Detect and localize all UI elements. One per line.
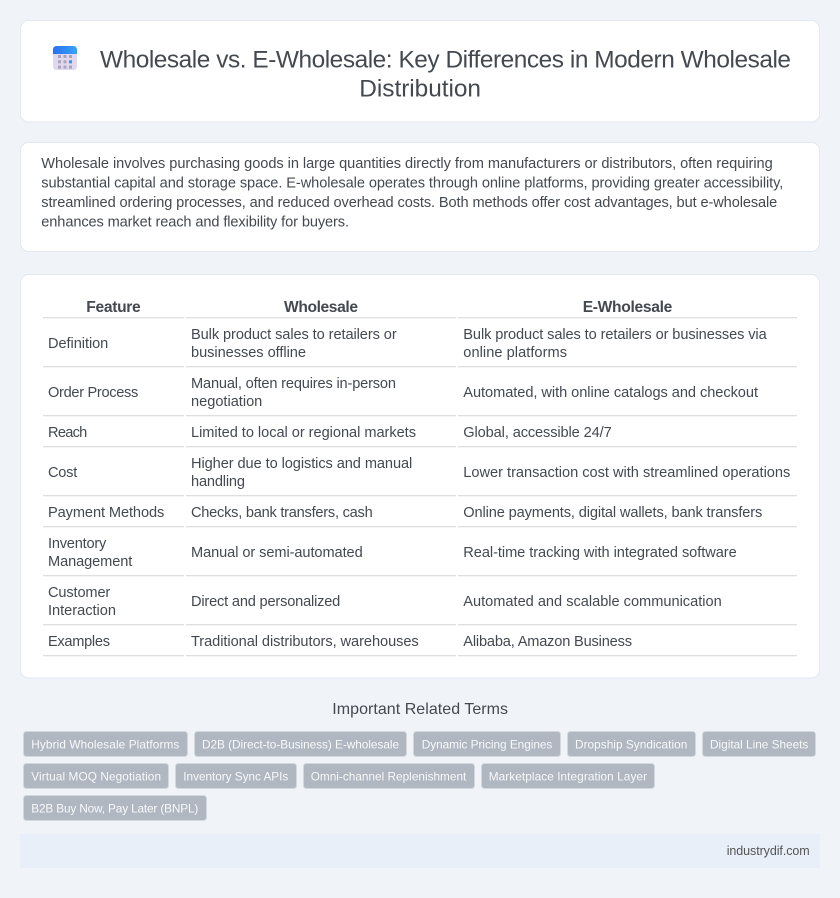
- tag list: [24, 732, 816, 820]
- icon: calendar: [53, 46, 77, 70]
- tag: hybrid wholesale platforms: [24, 732, 188, 756]
- text block: introduction paragraph: substantial capital and storage space. E-wholesale operates through online platforms, providing greater accessibility,: [41, 176, 783, 192]
- tag: hybrid wholesale platforms: Hybrid Wholesale Platforms: [31, 737, 179, 751]
- tag: dropship syndication: Dropship Syndication: [575, 737, 687, 751]
- table row: customer interaction: [48, 585, 722, 619]
- tag: dropship syndication: [568, 732, 696, 756]
- table row: cost: Lower transaction cost with streamlined operations: [463, 465, 790, 481]
- table row: definition: Definition: [48, 336, 108, 352]
- tag: marketplace integration layer: Marketplace Integration Layer: [489, 769, 647, 783]
- table row: order process: Manual, often requires in-person: [191, 376, 396, 392]
- table row: cost: Higher due to logistics and manual: [191, 456, 412, 472]
- tag: inventory sync apis: Inventory Sync APIs: [183, 769, 288, 783]
- table row: payment methods: Checks, bank transfers, cash: [191, 505, 373, 521]
- table row: definition: [48, 327, 768, 361]
- tag: omni-channel replenishment: Omni-channel Replenishment: [311, 769, 467, 783]
- table row: order process: [48, 376, 758, 410]
- title: [100, 46, 791, 102]
- table row: payment methods: Payment Methods: [48, 505, 164, 521]
- table row: inventory management: Manual or semi-automated: [191, 545, 363, 561]
- table row: order process: Automated, with online catalogs and checkout: [463, 385, 758, 401]
- table row: definition: Bulk product sales to retailers or: [191, 327, 397, 343]
- table row: examples: Traditional distributors, warehouses: [191, 634, 419, 650]
- tag: marketplace integration layer: [482, 764, 654, 788]
- table row: reach: Global, accessible 24/7: [463, 425, 612, 441]
- panel: title card: [20, 20, 820, 122]
- footer: [20, 834, 820, 868]
- table row: definition: Bulk product sales to retailers or businesses via: [463, 327, 768, 343]
- table row: examples: Examples: [48, 634, 110, 650]
- table row: definition: online platforms: [463, 345, 567, 361]
- table row: payment methods: Online payments, digital wallets, bank transfers: [463, 505, 762, 521]
- table row: reach: [48, 425, 612, 441]
- tag: d2b e-wholesale: D2B (Direct-to-Business) E-wholesale: [202, 737, 399, 751]
- tag: dynamic pricing engines: Dynamic Pricing Engines: [422, 737, 552, 751]
- table row: inventory management: Real-time tracking with integrated software: [463, 545, 737, 561]
- table header: Wholesale: [284, 299, 358, 316]
- table row: order process: negotiation: [191, 394, 262, 410]
- tag: d2b e-wholesale: [194, 732, 406, 756]
- footer: industrydif.com: [727, 844, 810, 858]
- table row: inventory management: [48, 536, 737, 570]
- table row: reach: Reach: [48, 425, 87, 441]
- table row: customer interaction: Customer: [48, 585, 110, 601]
- table row: inventory management: Inventory: [48, 536, 107, 552]
- table row: examples: Alibaba, Amazon Business: [463, 634, 632, 650]
- tag: inventory sync apis: [176, 764, 296, 788]
- title: Wholesale vs. E-Wholesale: Key Differences in Modern Wholesale: [100, 46, 791, 74]
- table header: Feature: [86, 299, 141, 316]
- tag: digital line sheets: Digital Line Sheets: [710, 737, 808, 751]
- table row: customer interaction: Direct and personalized: [191, 594, 340, 610]
- table row: examples: [48, 634, 632, 650]
- table row: order process: Order Process: [48, 385, 138, 401]
- tag: omni-channel replenishment: [304, 764, 474, 788]
- table row: reach: Limited to local or regional markets: [191, 425, 416, 441]
- heading: important related terms: Important Related Terms: [332, 701, 508, 718]
- table row: payment methods: [48, 505, 762, 521]
- table row: cost: Cost: [48, 465, 77, 481]
- text block: introduction paragraph: Wholesale involves purchasing goods in large quantities directly from manufacturers or distributors, often requiring: [41, 156, 773, 172]
- tag: b2b bnpl: B2B Buy Now, Pay Later (BNPL): [31, 801, 198, 815]
- text block: introduction paragraph: [41, 156, 783, 230]
- tag: digital line sheets: [702, 732, 816, 756]
- table row: cost: handling: [191, 474, 245, 490]
- panel: introduction: [20, 142, 820, 252]
- tag: virtual moq negotiation: [24, 764, 168, 788]
- text block: introduction paragraph: streamlined ordering processes, and reduced overhead costs. Both methods offer cost advantages, but e-wholesale: [41, 195, 777, 211]
- table row: customer interaction: Interaction: [48, 603, 116, 619]
- tag: b2b bnpl: [24, 796, 206, 820]
- table row: cost: [48, 456, 790, 490]
- table row: definition: businesses offline: [191, 345, 306, 361]
- tag: dynamic pricing engines: [414, 732, 560, 756]
- table row: customer interaction: Automated and scalable communication: [463, 594, 722, 610]
- title: Distribution: [359, 76, 481, 102]
- table row: inventory management: Management: [48, 554, 132, 570]
- table header: E-Wholesale: [583, 299, 673, 316]
- tag: virtual moq negotiation: Virtual MOQ Negotiation: [31, 769, 161, 783]
- panel: comparison table: [20, 274, 820, 678]
- table header: [86, 299, 673, 316]
- text block: introduction paragraph: enhances market reach and flexibility for buyers.: [41, 214, 349, 230]
